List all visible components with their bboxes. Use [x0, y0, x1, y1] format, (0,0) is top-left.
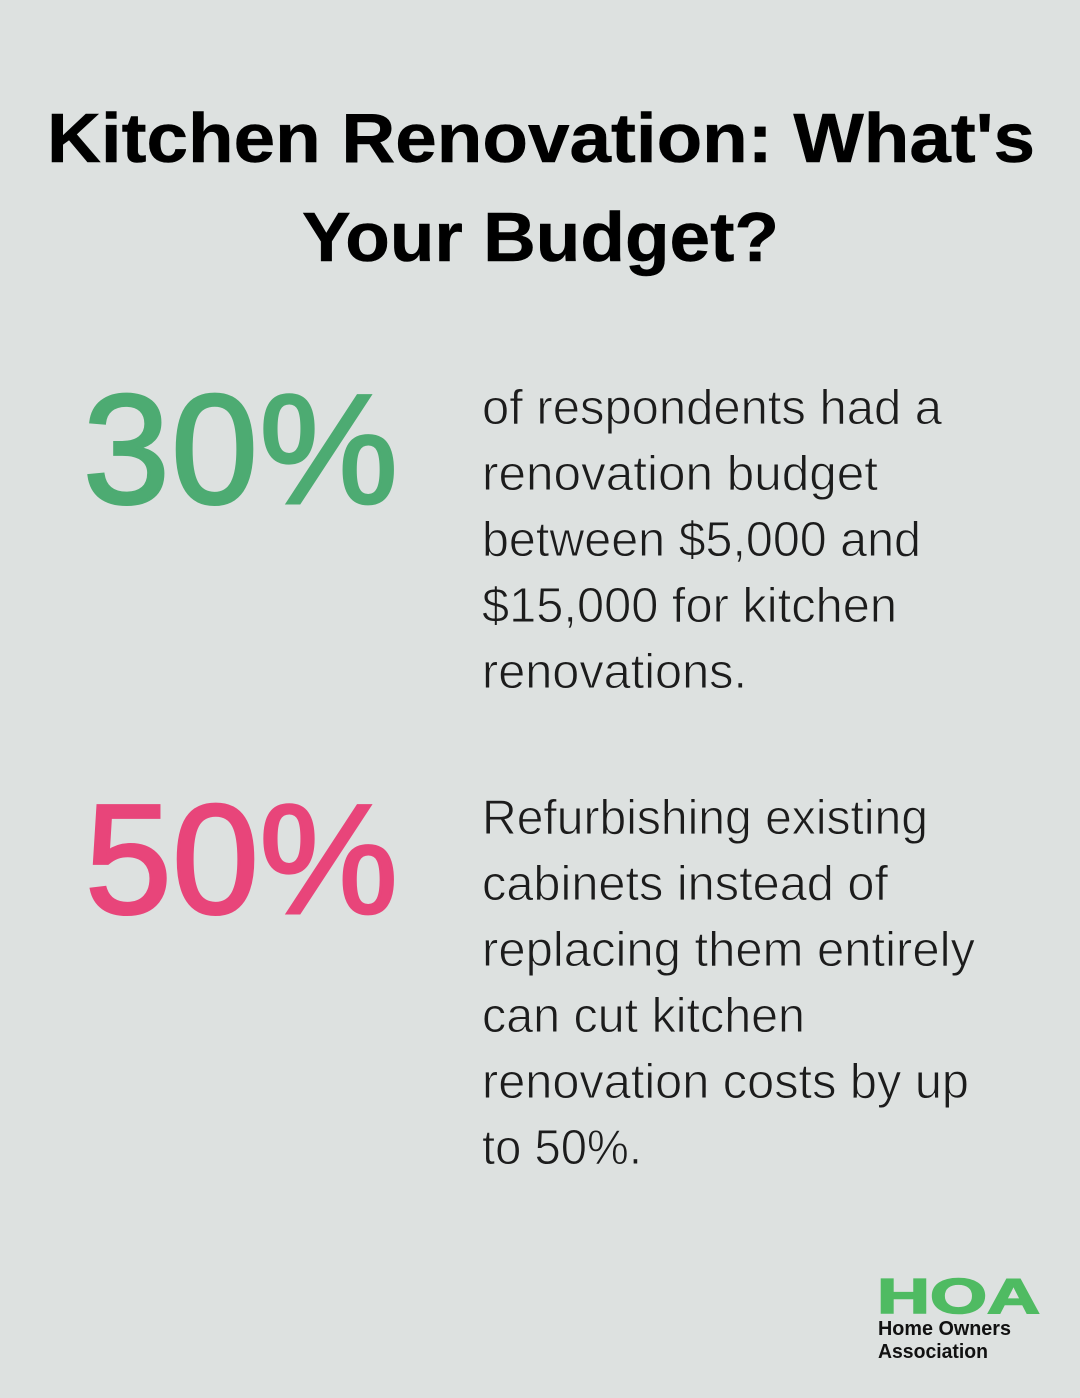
text block: 50% description: replacing them entirely: [482, 923, 975, 977]
logo: Home Owners Association: [877, 1270, 1040, 1363]
text block: 50% description: to 50%.: [482, 1121, 642, 1175]
text block: 50% description: [482, 791, 975, 1175]
stat: 30%: 30%: [83, 363, 398, 537]
title: Your Budget?: [302, 198, 779, 276]
title: [47, 99, 1035, 276]
stat: 50%: 50%: [85, 773, 398, 947]
text block: 50% description: renovation costs by up: [482, 1055, 969, 1109]
logo: Home Owners Association: HOA: [877, 1270, 1040, 1324]
text block: 50% description: Refurbishing existing: [482, 791, 928, 845]
text block: 30% description: $15,000 for kitchen: [482, 579, 897, 633]
text block: 30% description: renovations.: [482, 645, 747, 699]
text block: 30% description: [482, 381, 943, 699]
text block: 50% description: can cut kitchen: [482, 989, 805, 1043]
text block: 50% description: cabinets instead of: [482, 857, 888, 911]
text block: 30% description: between $5,000 and: [482, 513, 921, 567]
logo: Home Owners Association: Home Owners: [878, 1318, 1011, 1340]
logo: Home Owners Association: Association: [878, 1341, 988, 1363]
text block: 30% description: renovation budget: [482, 447, 878, 501]
title: Kitchen Renovation: What's: [47, 99, 1035, 177]
text block: 30% description: of respondents had a: [482, 381, 943, 435]
